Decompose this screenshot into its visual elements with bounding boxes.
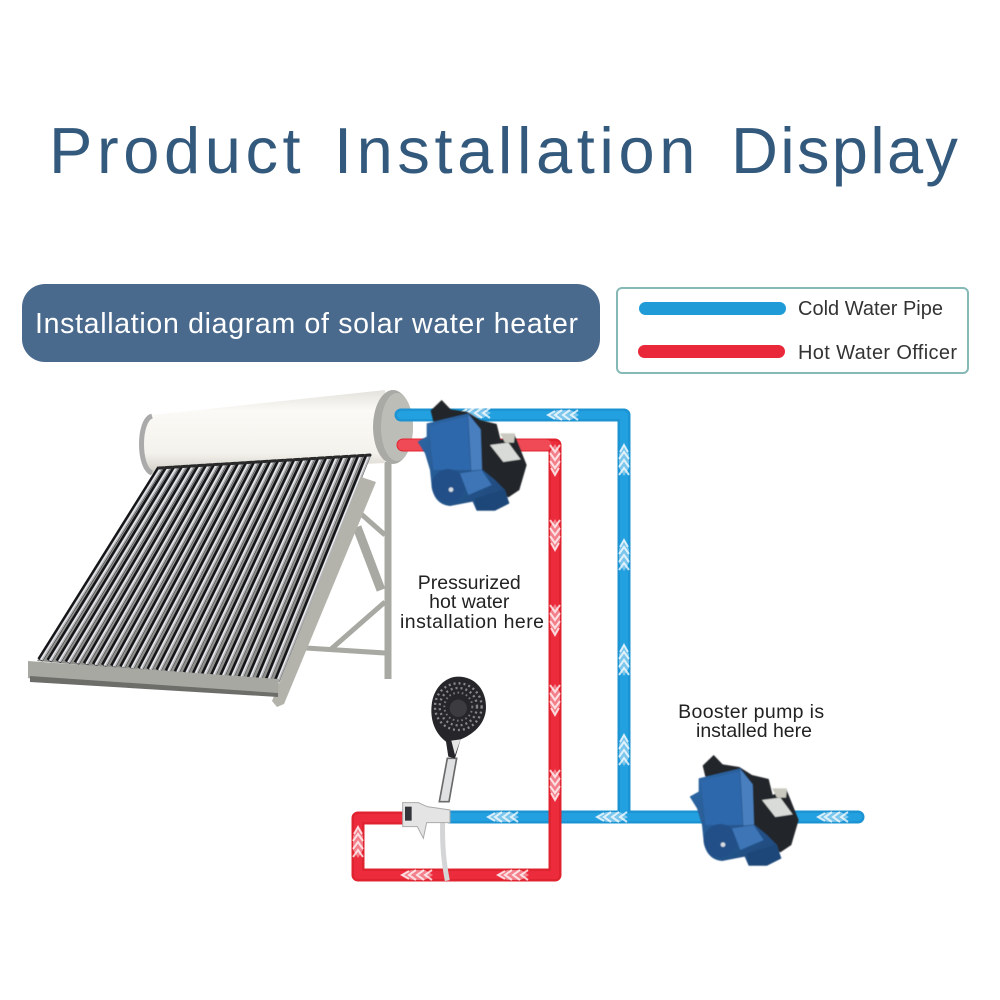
solar water heater [28,390,413,707]
label: pressurized hot water: hot water [429,591,510,613]
bottom rail [28,661,279,696]
handle [439,758,457,802]
label: booster pump: Booster pump is [678,701,824,723]
legend: hot water pipe: Hot Water Officer [798,342,957,364]
hot water pipe [358,445,555,875]
upper pump [418,400,527,511]
storage tank [140,390,413,474]
support frame [290,462,388,679]
label: booster pump: installed here [696,720,812,742]
shower head [431,677,486,758]
vacuum tubes [37,454,370,682]
banner heading [22,284,600,362]
mount [403,803,450,838]
legend: cold water pipe [639,298,943,320]
legend [617,288,968,373]
title: Product [49,114,305,187]
side rail [272,477,376,707]
label: pressurized hot water: installation here [400,611,544,633]
cold water pipe [401,415,858,817]
legend: hot water pipe [638,342,957,364]
hose [443,820,447,881]
shower head and mount [403,677,486,881]
legend: cold water pipe: Cold Water Pipe [798,298,943,320]
flow arrows [353,408,849,880]
label: pressurized hot water: Pressurized [418,572,521,594]
banner heading: Installation diagram of solar water heater [35,308,578,340]
title: Display [731,114,960,187]
title: Installation [334,114,700,187]
lower booster pump [690,755,799,866]
